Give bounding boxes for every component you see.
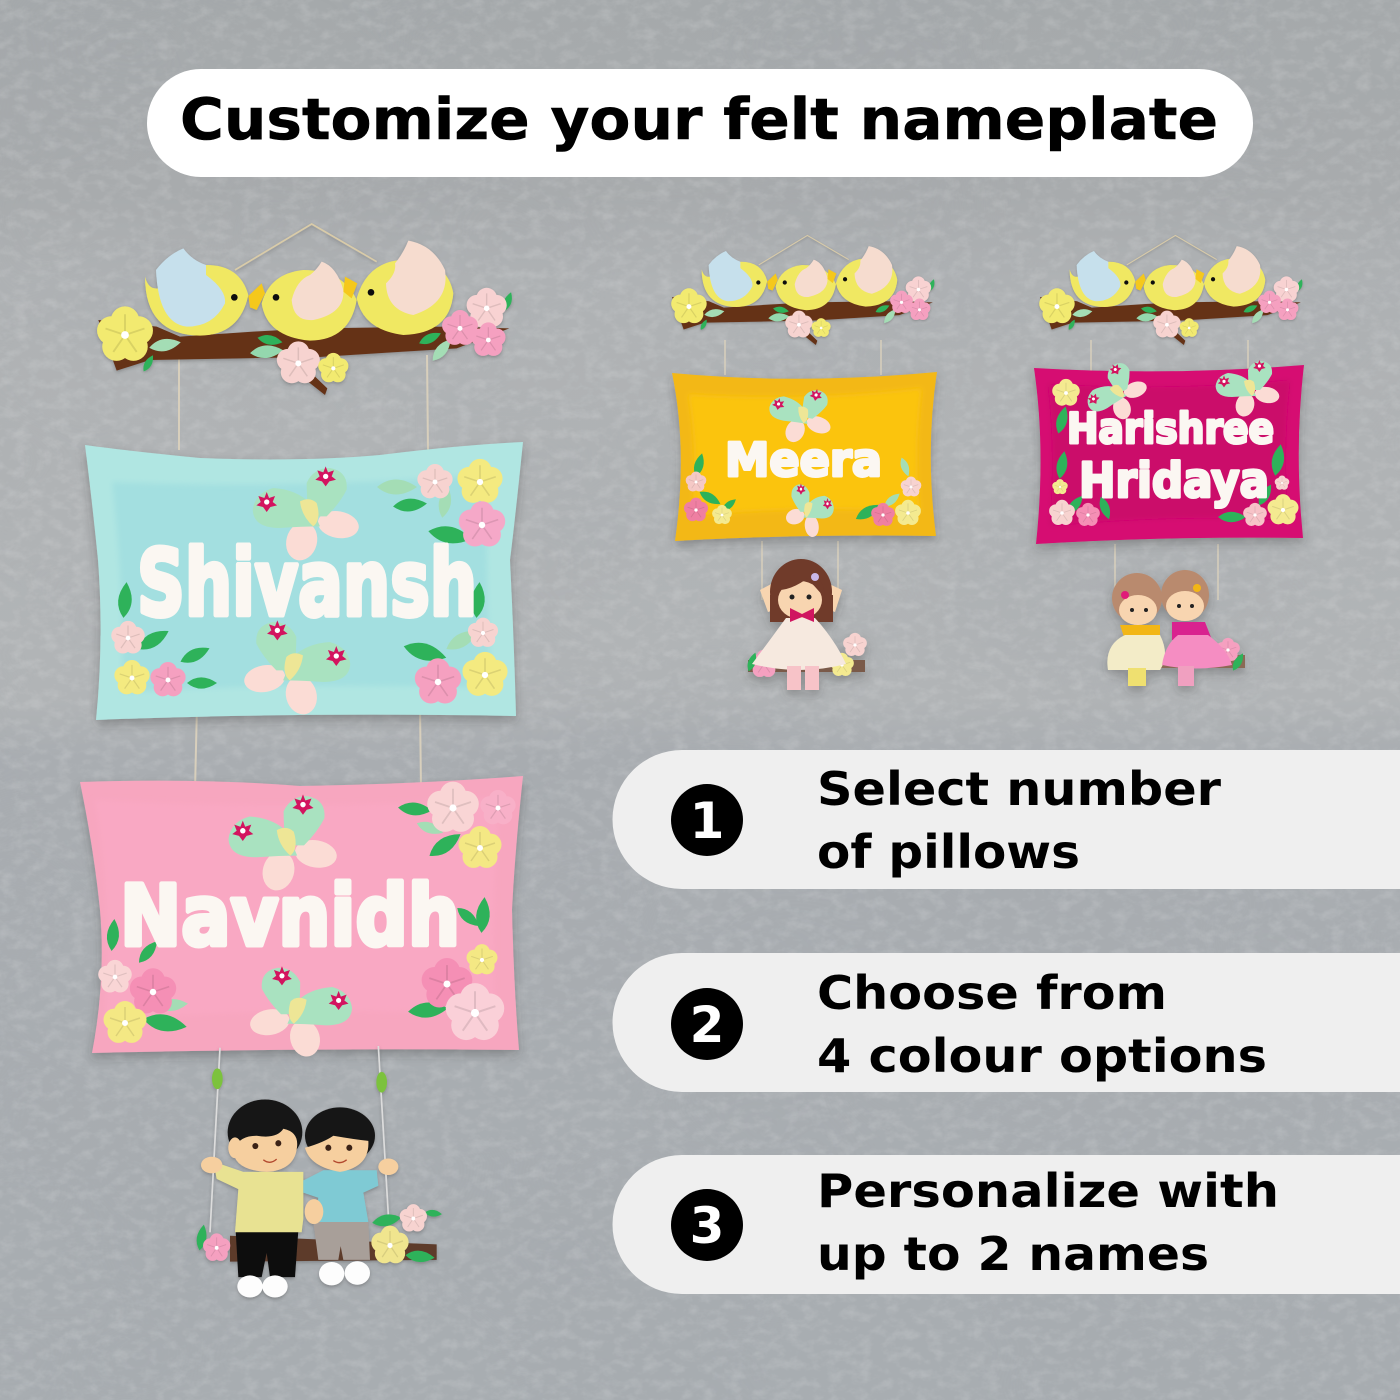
small nameplate: Meera [671, 235, 937, 690]
step 1 text: of pillows [817, 825, 1080, 879]
title pill [147, 69, 1253, 177]
number badge 1: 1 [690, 792, 724, 850]
step 1 text [817, 762, 1221, 879]
bird branch [97, 224, 515, 395]
large nameplate: Shivansh and Navnidh [80, 224, 523, 1298]
butterfly bottom [242, 620, 350, 718]
number badge 2 [671, 988, 743, 1060]
number badge 3 [671, 1189, 743, 1261]
step 3 [613, 1155, 1400, 1294]
magenta pillow [1034, 365, 1304, 544]
step 3 text: up to 2 names [817, 1227, 1209, 1281]
butterfly right [1216, 360, 1281, 419]
butterfly bottom [248, 966, 352, 1060]
step 2 text: Choose from [817, 966, 1167, 1020]
bird branch [1039, 235, 1304, 345]
butterfly top [253, 466, 361, 564]
hanging strings [1091, 340, 1248, 605]
butterfly top [764, 381, 838, 450]
step 2 text [817, 966, 1267, 1083]
butterfly bottom [785, 483, 834, 539]
name: Navnidh: Navnidh [120, 867, 460, 965]
hanging strings [179, 355, 428, 790]
girl on swing [745, 559, 867, 690]
yellow pillow [672, 372, 937, 541]
step 2 text: 4 colour options [817, 1029, 1267, 1083]
title pill: Customize your felt nameplate [180, 87, 1218, 153]
name: Harishree: Harishree [1067, 404, 1274, 453]
hanging strings [725, 340, 881, 600]
name: Meera: Meera [725, 433, 882, 487]
step 3 text [817, 1164, 1279, 1281]
number badge 2: 2 [690, 996, 724, 1054]
number badge 3: 3 [690, 1197, 724, 1255]
butterfly left [1076, 354, 1158, 434]
step 1 text: Select number [817, 762, 1221, 816]
step 2 [613, 953, 1400, 1092]
boys on swing [195, 1046, 442, 1298]
step 1 [613, 750, 1400, 889]
name: Shivansh: Shivansh [137, 530, 477, 637]
two girls on swing [1107, 570, 1246, 686]
number badge 1 [671, 784, 743, 856]
step 3 text: Personalize with [817, 1164, 1279, 1218]
butterfly top [229, 794, 339, 894]
bird branch [671, 235, 936, 345]
pink pillow [80, 776, 523, 1053]
small nameplate: Harishree and Hridaya [1034, 235, 1304, 686]
name: Hridaya: Hridaya [1079, 453, 1269, 509]
blue pillow [85, 442, 523, 720]
